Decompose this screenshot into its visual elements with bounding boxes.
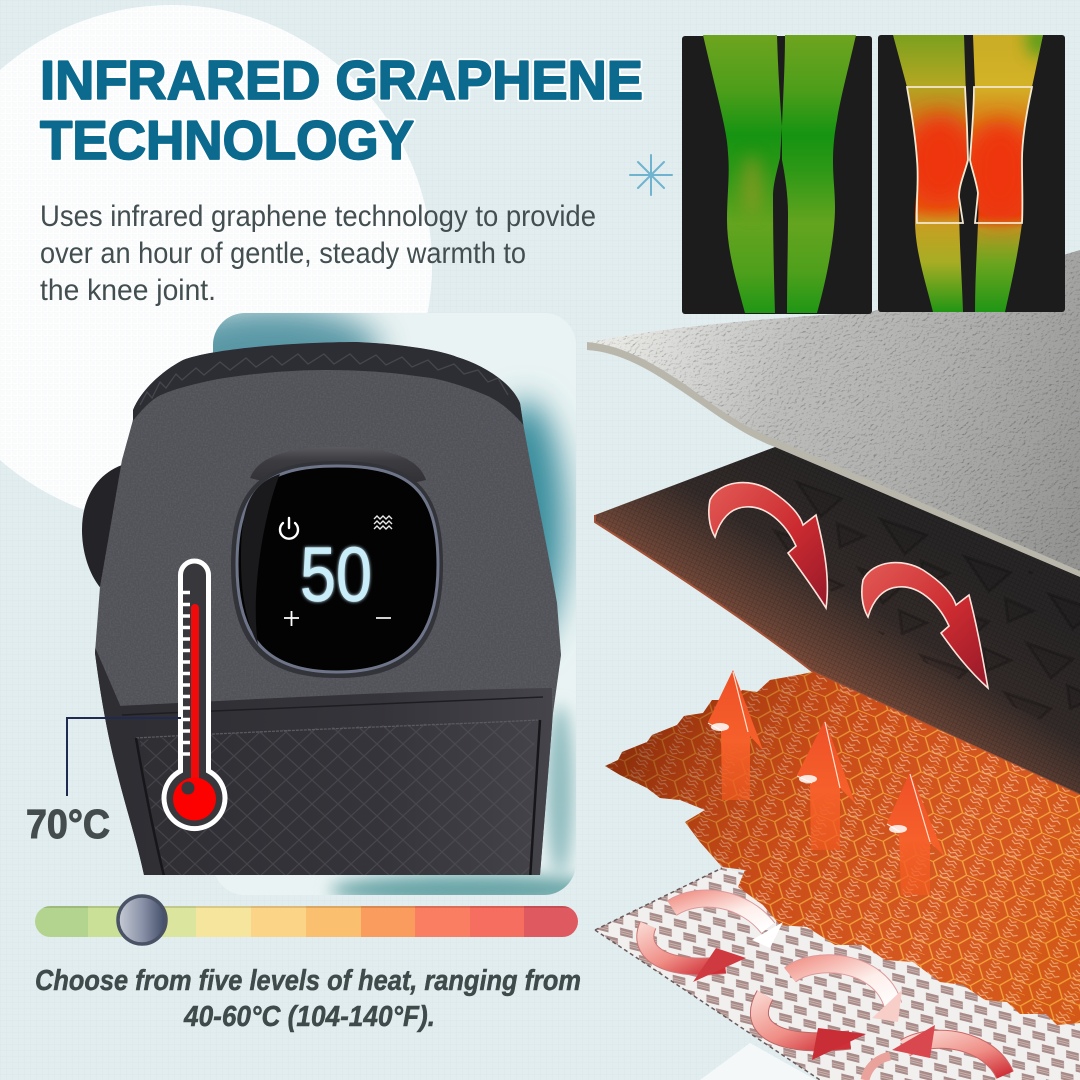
icon: heat waves: [374, 516, 392, 529]
knee brace product: [82, 340, 575, 880]
diamond texture: [140, 722, 535, 875]
treated zone outline: left: [907, 87, 968, 223]
teal glow right: [485, 400, 565, 650]
title lettering: INFRARED GRAPHENE: [40, 49, 643, 111]
circular arrows: air flow 3: [865, 1025, 1005, 1080]
temperature label: 70°C: [26, 801, 110, 847]
pocket seam: [136, 720, 538, 738]
hexagon shading: [605, 672, 1080, 1025]
arrow: heat down 2: [862, 563, 988, 688]
side panel dark edges: [95, 648, 145, 875]
thermometer shell: [164, 561, 225, 829]
mesh dark edge: [595, 868, 820, 1080]
right leg green thermal map: [782, 35, 856, 313]
mercury column: [191, 604, 199, 780]
screen glare: [241, 474, 280, 645]
top fabric layer: [587, 250, 1080, 577]
graphene hexagon layer: [605, 672, 1080, 1025]
heat levels caption: [35, 965, 581, 1033]
brown heat-conduction layer: [595, 447, 1080, 795]
outer rim: [231, 461, 443, 678]
brace body: [95, 342, 561, 875]
arrow: heat up 3: [887, 772, 945, 895]
arrow ridge and glints: [887, 774, 930, 842]
description text: the knee joint.: [40, 274, 216, 307]
layer edge: [595, 515, 1080, 795]
arrow: heat up 2: [797, 720, 855, 850]
weave texture: [595, 447, 1080, 795]
lower darker section: [118, 688, 552, 880]
arrow: heat down 1: [709, 483, 827, 608]
title halo: [40, 49, 643, 171]
thermal panel: before heating: [682, 35, 872, 314]
heat level slider: [35, 896, 578, 944]
right leg heat map: [970, 35, 1043, 312]
top lip: [250, 447, 426, 500]
plus button: [284, 611, 299, 626]
mercury bulb: [173, 778, 216, 820]
description text: over an hour of gentle, steady warmth to: [40, 237, 526, 270]
tread texture: [770, 470, 1080, 740]
control panel: [231, 447, 443, 678]
left leg green thermal map: [703, 35, 782, 313]
temperature callout line: [67, 718, 181, 796]
white corner wedge: [700, 1043, 816, 1080]
arrow ridge and glints: [797, 722, 840, 788]
heat levels caption: 40-60°C (104-140°F).: [183, 1001, 435, 1033]
warm calf spot left: [742, 155, 762, 215]
slider knob: [118, 896, 166, 944]
tick marks: [183, 592, 190, 754]
icon: power: [280, 518, 298, 539]
heat levels caption: Choose from five levels of heat, ranging from: [35, 965, 581, 997]
white circle backdrop: [0, 5, 432, 525]
teal glow top: [213, 313, 400, 352]
description text: [40, 200, 596, 307]
circular arrows: air flow 2: [759, 964, 902, 1060]
thermometer: [164, 561, 225, 829]
treated zone outline: right: [970, 87, 1032, 223]
right leg hot zone: [971, 35, 1043, 236]
bottom mesh layer: [595, 868, 1080, 1080]
title lettering: [40, 49, 643, 171]
top hem band: [125, 342, 528, 430]
left leg hot zone: [906, 114, 974, 206]
side strap: [82, 465, 122, 600]
arrow ridge and glints: [708, 672, 748, 732]
icon: heat sparkle: [630, 155, 672, 195]
top layer edge: [587, 342, 1080, 579]
thermal panel: after heating: [878, 22, 1065, 312]
side stitching: [136, 720, 540, 880]
fabric grain: [90, 340, 570, 740]
title halo: INFRARED GRAPHENE: [40, 49, 643, 111]
slider track: [35, 906, 578, 937]
description text: Uses infrared graphene technology to provide: [40, 200, 596, 233]
screen: [237, 466, 438, 672]
title: [40, 49, 643, 171]
arrow: heat up 1: [708, 670, 763, 800]
minus button: [376, 617, 391, 619]
left leg heat map: [893, 35, 968, 312]
circular arrows: air flow 1: [645, 898, 783, 982]
digital readout: 50: [300, 532, 372, 618]
teal glow bottom: [324, 864, 576, 895]
top hem zigzag stitching: [140, 354, 508, 405]
title lettering: TECHNOLOGY: [40, 109, 414, 171]
teal glow lower right: [547, 705, 573, 875]
pocket band highlight: [122, 697, 543, 715]
bulb highlight: [182, 782, 194, 794]
title halo: TECHNOLOGY: [40, 109, 414, 171]
product backdrop panel: [213, 313, 576, 895]
